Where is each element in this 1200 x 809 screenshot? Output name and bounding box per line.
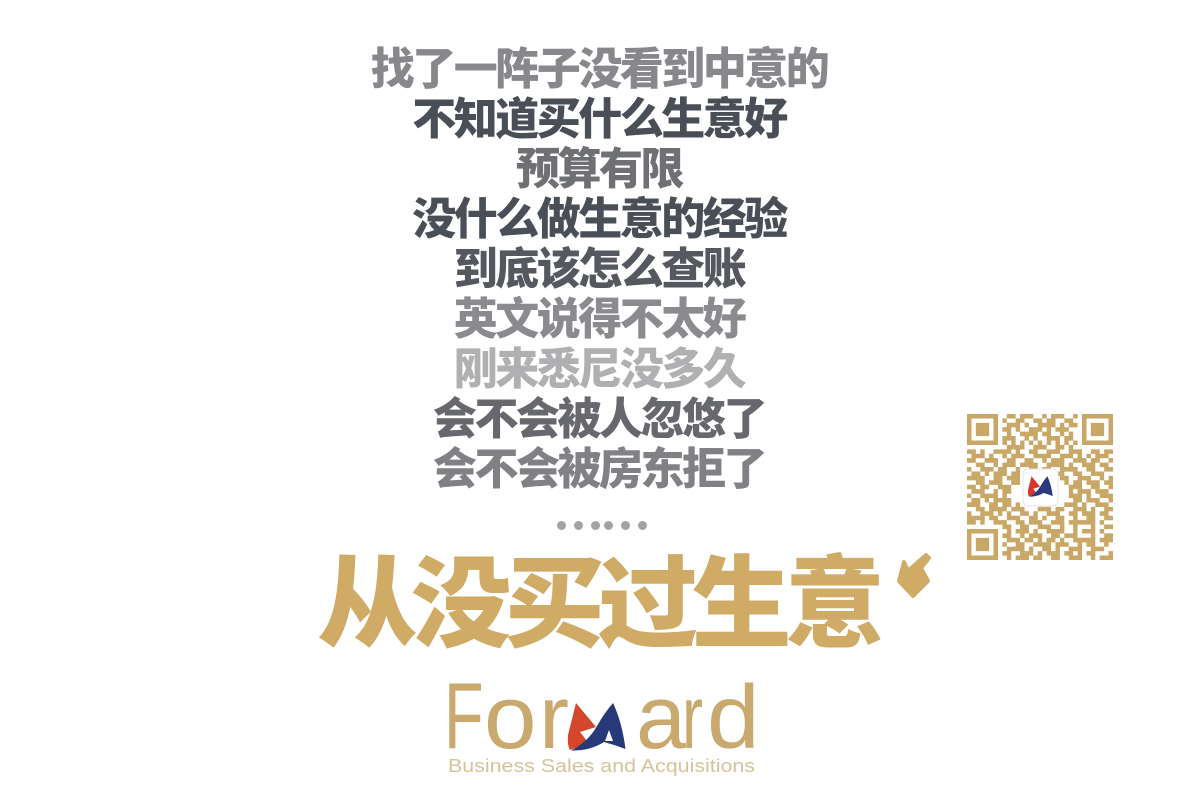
QR code bbox=[967, 414, 1113, 560]
question lines bbox=[371, 45, 828, 494]
line 9: 会不会被房东拒了 bbox=[433, 445, 765, 494]
logo mark: blue sail bbox=[571, 703, 626, 751]
line 6: 英文说得不太好 bbox=[454, 295, 744, 344]
logo mark: red sail bbox=[568, 703, 596, 750]
line 3: 预算有限 bbox=[516, 145, 682, 194]
line 2: 不知道买什么生意好 bbox=[412, 95, 786, 144]
logo wordmark right bbox=[636, 666, 760, 768]
line 5: 到底该怎么查账 bbox=[454, 245, 744, 294]
icon: pointing hand bbox=[897, 552, 932, 598]
main heading: 从没买过生意 bbox=[318, 549, 878, 661]
line 1: 找了一阵子没看到中意的 bbox=[371, 45, 827, 94]
ellipsis dots bbox=[557, 521, 647, 530]
logo tagline: Business Sales and Acquisitions bbox=[448, 756, 755, 776]
line 4: 没什么做生意的经验 bbox=[412, 195, 786, 244]
line 8: 会不会被人忽悠了 bbox=[433, 395, 765, 444]
logo: Forward bbox=[444, 675, 760, 776]
QR centre logo bbox=[1022, 468, 1058, 506]
line 7: 刚来悉尼没多久 bbox=[454, 345, 744, 394]
logo wordmark left bbox=[444, 664, 569, 769]
